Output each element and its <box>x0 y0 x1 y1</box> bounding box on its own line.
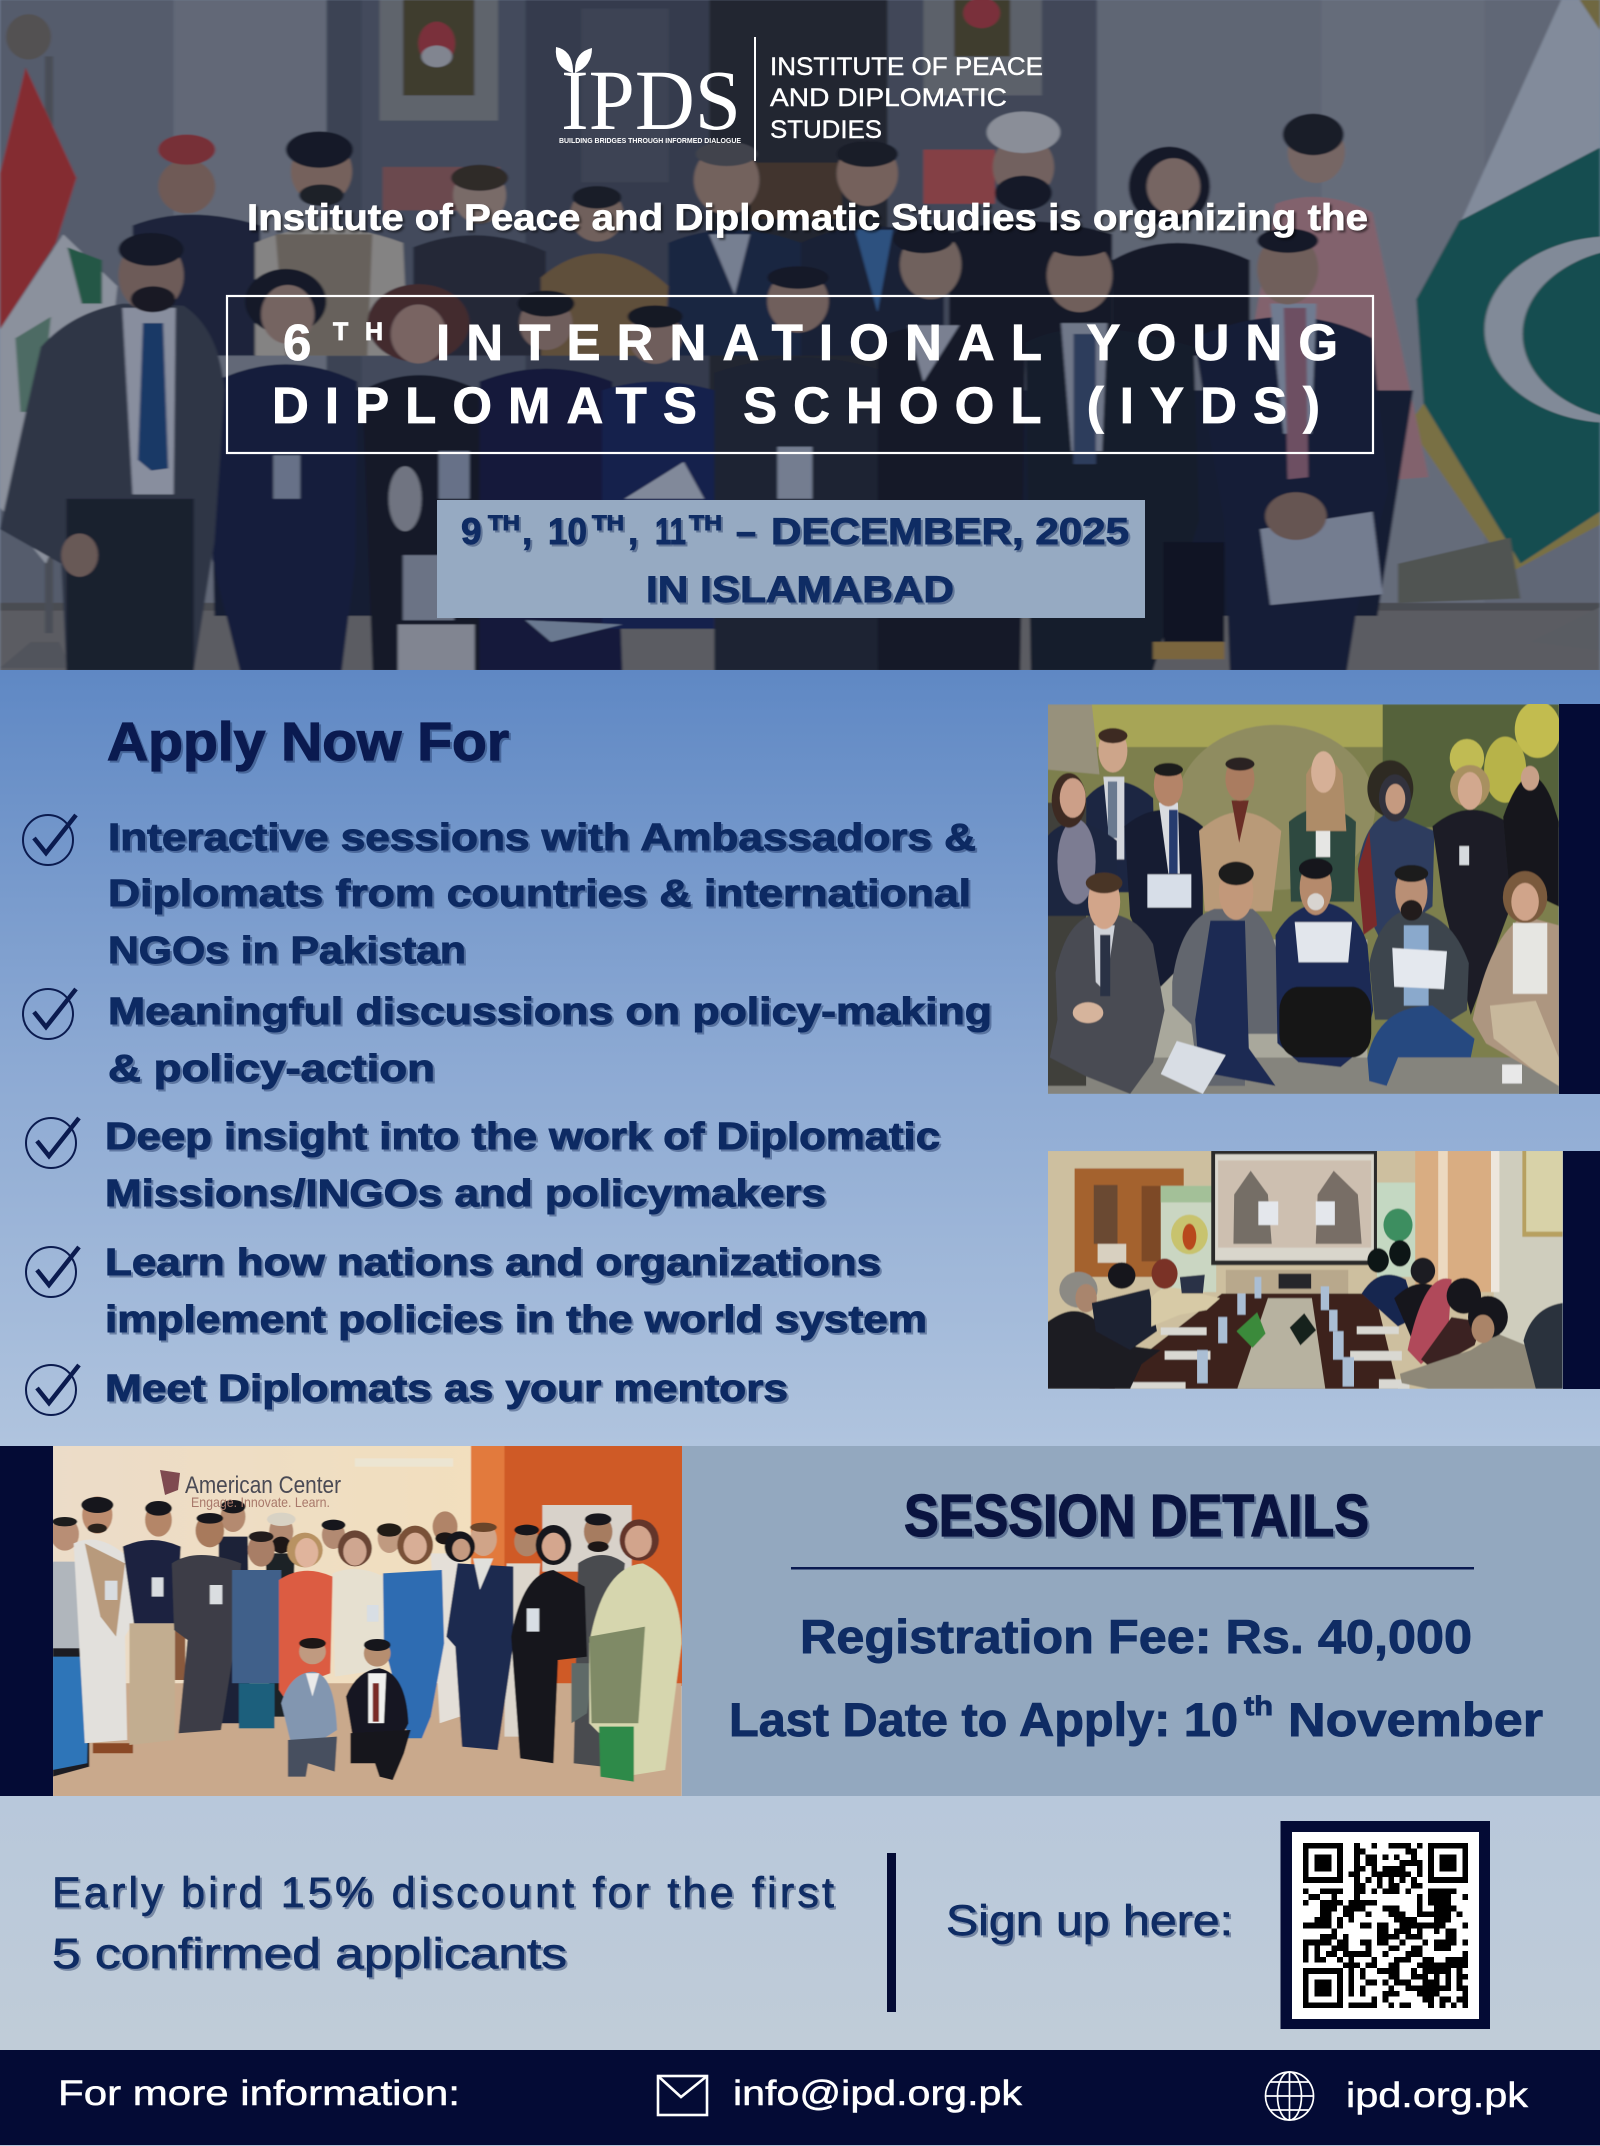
back row <box>1048 728 1559 1015</box>
item 1: NGOs in Pakistan <box>108 930 466 972</box>
panel: session details: November <box>1288 1693 1543 1746</box>
right participants <box>1362 1240 1563 1389</box>
logo: IPDS: INSTITUTE OF PEACE <box>770 53 1043 81</box>
logo: IPDS: STUDIES <box>770 116 882 144</box>
photo: American Center group <box>50 1446 683 1796</box>
title box: 6th International Young Diplomats School <box>227 296 1373 453</box>
hero: Pakistani flag <box>1398 0 1600 651</box>
date box: 10 <box>548 511 587 552</box>
screen <box>1211 1150 1377 1265</box>
icon: check marks <box>23 815 79 1415</box>
footer bar: ipd.org.pk <box>1346 2076 1529 2115</box>
sign up label: Sign up here: <box>946 1897 1233 1945</box>
center sign text: Engage. Innovate. Learn. <box>191 1494 330 1510</box>
accent bar: photo three <box>0 1446 53 1796</box>
logo: IPDS: IPDS <box>561 52 741 148</box>
item 5: Meet Diplomats as your mentors <box>105 1368 788 1410</box>
panel: session details <box>682 1446 1600 1796</box>
list of benefits <box>105 817 992 1410</box>
logo: IPDS <box>556 37 1043 161</box>
item 4: implement policies in the world system <box>105 1299 927 1341</box>
date box: TH <box>689 512 722 535</box>
date box: – <box>736 511 756 552</box>
date box: TH <box>592 512 624 535</box>
item 1 <box>108 817 976 972</box>
two boys crouching <box>281 1638 411 1780</box>
early bird offer: 5 confirmed applicants <box>52 1930 567 1978</box>
back row <box>219 1500 625 1767</box>
panel: sign up band <box>0 1796 1600 2050</box>
table flags <box>1237 1312 1266 1348</box>
accent bar: photo two <box>1563 1151 1600 1389</box>
title box: 6th International Young Diplomats School: INTERNATIONAL YOUNG <box>436 314 1338 371</box>
left participants <box>1048 1259 1220 1389</box>
panel: session details: th <box>1244 1691 1273 1721</box>
date box: TH <box>488 512 520 535</box>
center sign text <box>160 1470 341 1510</box>
accent bar: photo one <box>1559 704 1600 1094</box>
item 4: Learn how nations and organizations <box>105 1242 881 1284</box>
heading: Apply Now For: Apply Now For <box>107 712 509 772</box>
date box: , <box>628 511 638 552</box>
date box <box>437 500 1145 618</box>
item 2: & policy-action <box>108 1048 435 1090</box>
hero: flag poles and Iraqi flag <box>0 14 117 668</box>
hero: front row of delegates <box>209 224 1413 671</box>
item 2 <box>108 991 992 1090</box>
date box: 11 <box>655 511 686 552</box>
certificate one <box>1147 874 1191 907</box>
hero: dark tint over photo <box>0 0 1600 670</box>
front standing row <box>50 1496 682 1782</box>
item 3 <box>105 1116 940 1215</box>
photo: certificates group in garden <box>1048 701 1561 1094</box>
banner <box>1161 1186 1216 1292</box>
hero: back row of delegates <box>133 111 1429 481</box>
title box: 6th International Young Diplomats School: 6 <box>283 314 311 371</box>
item 3: Deep insight into the work of Diplomatic <box>105 1116 940 1158</box>
panel: session details: Registration Fee: Rs. 40,000 <box>800 1610 1472 1663</box>
footer bar: info@ipd.org.pk <box>733 2074 1023 2113</box>
panel: apply now <box>0 670 1600 1447</box>
date box: 9 <box>461 511 482 552</box>
date box: IN ISLAMABAD <box>646 569 954 610</box>
logo: IPDS: AND DIPLOMATIC <box>770 84 1007 112</box>
item 2: Meaningful discussions on policy-making <box>108 991 992 1033</box>
logo: IPDS: BUILDING BRIDGES THROUGH INFORMED DIALOGUE <box>559 138 741 145</box>
title box: 6th International Young Diplomats School: DIPLOMATS SCHOOL (IYDS) <box>272 377 1320 434</box>
hero photo: delegates group in front of embassy <box>0 0 1600 671</box>
icon: globe <box>1266 2072 1314 2120</box>
early bird offer <box>52 1869 834 1978</box>
conference table <box>1100 1293 1398 1389</box>
photo: meeting with flags <box>1048 1150 1563 1389</box>
item 1: Diplomats from countries & international <box>108 873 971 915</box>
QR code <box>1280 1821 1490 2029</box>
footer bar: For more information: <box>58 2074 460 2113</box>
water bottles <box>1197 1277 1354 1386</box>
front row <box>1050 858 1559 1094</box>
intro line: Institute of Peace and Diplomatic Studies is organizing the <box>247 197 1368 238</box>
panel: session details: Last Date to Apply: 10 <box>729 1693 1238 1746</box>
item 3: Missions/INGOs and policymakers <box>105 1173 826 1215</box>
footer bar <box>0 2050 1600 2145</box>
logo mark: sprout leaves <box>556 47 592 73</box>
date box: DECEMBER, 2025 <box>771 511 1129 552</box>
item 1: Interactive sessions with Ambassadors & <box>108 817 976 859</box>
hero: front-left delegate in grey suit <box>0 233 224 671</box>
title box: 6th International Young Diplomats School: TH <box>333 318 383 346</box>
date box: , <box>522 511 532 552</box>
icon: envelope <box>658 2076 707 2115</box>
center sign text: American Center <box>185 1472 341 1499</box>
early bird offer: Early bird 15% discount for the first <box>52 1869 834 1917</box>
item 4 <box>105 1242 927 1341</box>
panel: session details: SESSION DETAILS <box>904 1483 1369 1549</box>
